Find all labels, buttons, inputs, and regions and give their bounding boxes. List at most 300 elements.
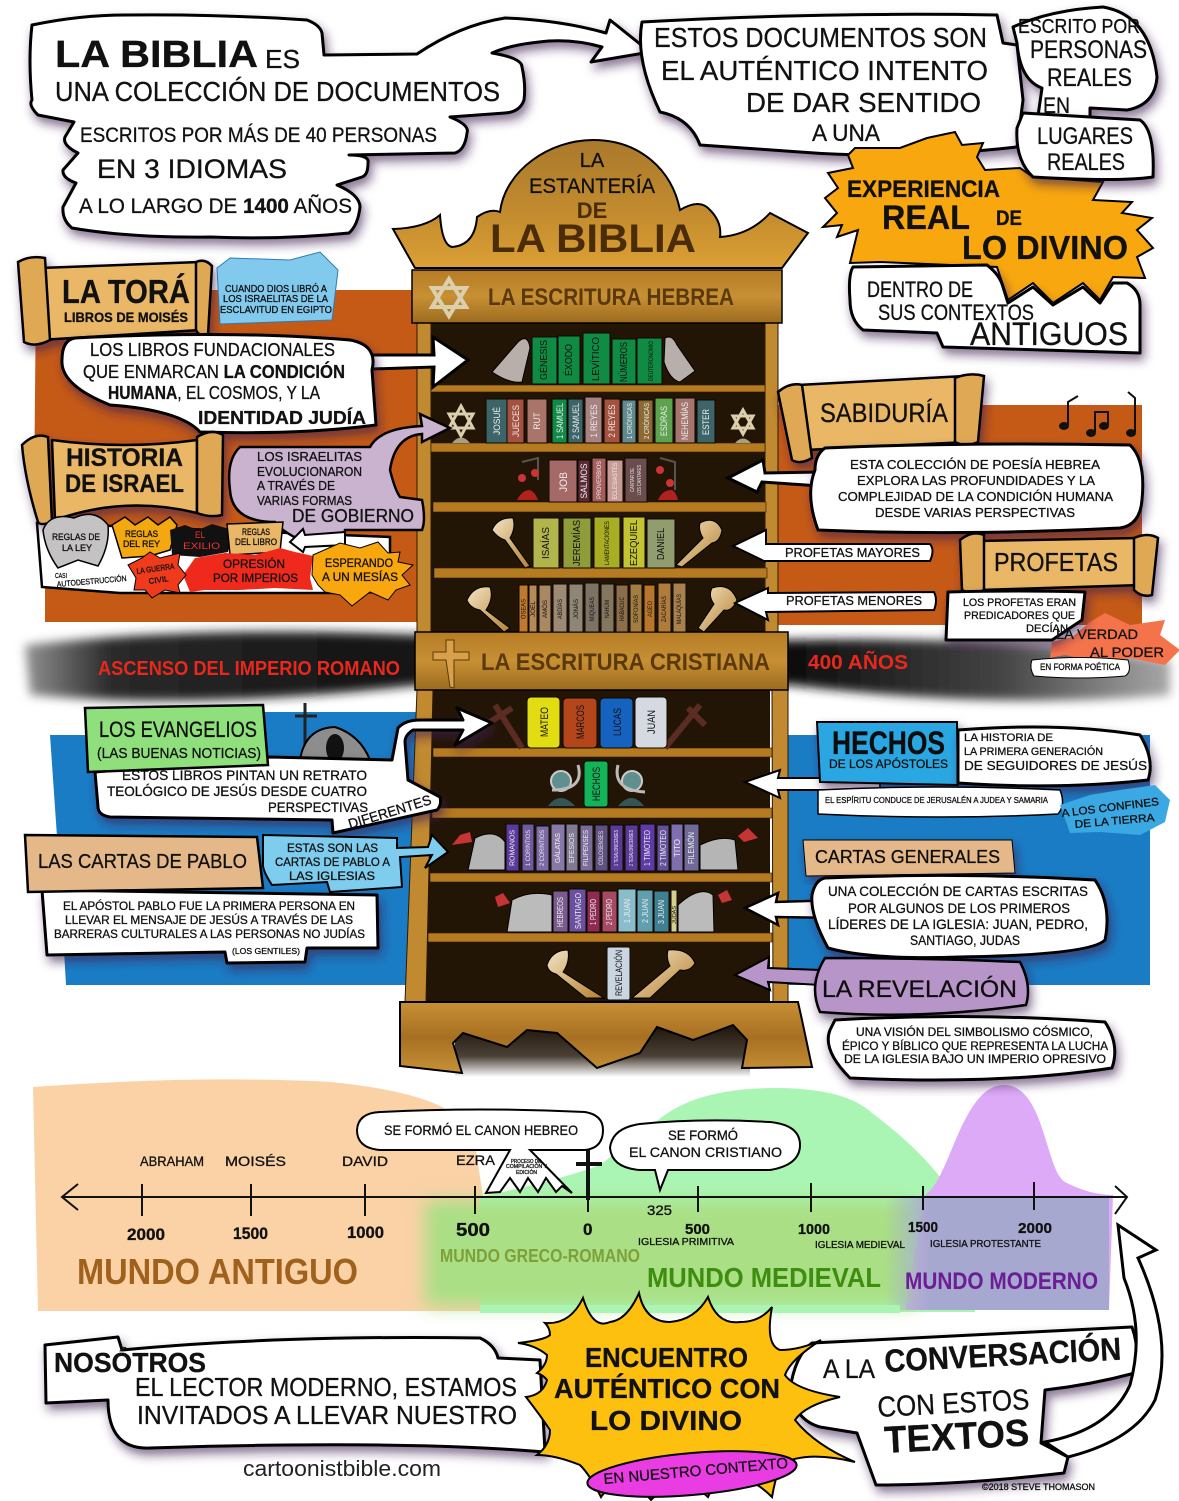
starburst text: REAL	[882, 199, 970, 237]
Nosotros text	[54, 1347, 517, 1430]
La Torá text	[62, 273, 190, 325]
Torah description text: HUMANA, EL COSMOS, Y LA	[108, 383, 320, 403]
badge: Hechos: DE LOS APÓSTOLES	[829, 756, 948, 771]
scroll: Profetas	[960, 533, 1158, 596]
starburst: authentic encounter: ENCUENTRO	[585, 1342, 748, 1373]
revelation description text: DE LA IGLESIA BAJO UN IMPERIO OPRESIVO	[844, 1052, 1106, 1066]
left column	[405, 322, 433, 1002]
tablet: rules of the law	[43, 514, 108, 568]
shelf 1: Torah books: GÉNESIS	[537, 340, 550, 380]
timeline years: 1500	[233, 1224, 268, 1243]
timeline years	[127, 1219, 1052, 1244]
bubble: Christian canon: EL CANON CRISTIANO	[629, 1144, 782, 1160]
real people and places text: REALES	[1047, 64, 1132, 92]
era labels: MUNDO GRECO-ROMANO	[440, 1246, 640, 1266]
bubble: Hebrew canon: SE FORMÓ EL CANON HEBREO	[384, 1122, 578, 1138]
shelf 8: Pauline letters: EFESIOS	[569, 833, 576, 863]
badge: Hechos	[817, 722, 958, 785]
badge: in our context	[586, 1444, 798, 1501]
shelf 2: history books: 2 SAMUEL	[571, 403, 581, 439]
crown title: LA BIBLIA	[490, 217, 696, 261]
documents text: ESTOS DOCUMENTOS SON	[654, 22, 987, 53]
ancient contexts text: SUS CONTEXTOS	[878, 300, 1034, 325]
shelf 4: major prophets: LAMENTACIONES	[605, 521, 611, 565]
documents text	[654, 22, 988, 147]
prophets description text: DECÍAN	[1026, 622, 1068, 635]
timeline	[62, 1110, 1127, 1295]
bubble: prophets description	[946, 591, 1085, 640]
timeline years: 2000	[127, 1225, 165, 1244]
Nosotros text: NOSÓTROS	[54, 1347, 206, 1378]
Paul description text: (LOS GENTILES)	[232, 947, 300, 956]
era labels: MUNDO ANTIGUO	[77, 1251, 358, 1292]
badge: rules of the king	[112, 517, 177, 558]
scroll: rules of the book: REGLAS	[242, 527, 270, 537]
arrow: minor prophets: PROFETAS MENORES	[786, 593, 922, 608]
shelf 2: history books: 1 REYES	[589, 404, 599, 438]
shelf 4: major prophets: EZEQUIEL	[629, 520, 640, 566]
bubble and arrow: forms of government: LOS ISRAELITAS	[257, 449, 362, 464]
arrow: minor prophets	[735, 588, 936, 620]
bubble and arrow: forms of government	[229, 414, 450, 545]
Historia de Israel text: DE ISRAEL	[65, 470, 184, 498]
general letters description text: SANTIAGO, JUDAS	[910, 932, 1020, 948]
Nosotros text: INVITADOS A LLEVAR NUESTRO	[137, 1400, 517, 1430]
shelf 10: Revelation with trumpets: REVELACIÓN	[614, 950, 624, 996]
shelf 1: Torah books	[492, 333, 695, 384]
shelf 1: Torah books: ÉXODO	[562, 344, 575, 376]
wisdom description text: EXPLORA LAS PROFUNDIDADES Y LA	[857, 473, 1095, 488]
shelf 5: minor prophets: OSEAS	[522, 599, 528, 619]
timeline ticks	[142, 1160, 1034, 1216]
title text: A LO LARGO DE 1400 AÑOS	[79, 194, 352, 218]
starburst text	[847, 176, 1128, 266]
burst: the exile: EXILIO	[183, 541, 220, 551]
bubble and arrow: forms of government: DE GOBIERNO	[292, 506, 414, 526]
documents text: A UNA	[812, 120, 880, 147]
scroll: rules of the book: DEL LIBRO	[235, 537, 277, 547]
wisdom description text: COMPLEJIDAD DE LA CONDICIÓN HUMANA	[838, 489, 1113, 504]
shelf 2: history books: JUECES	[511, 405, 521, 437]
shelf 8: Pauline letters: TITO	[673, 839, 682, 857]
Torah description text: LOS LIBROS FUNDACIONALES	[90, 340, 335, 360]
website credit: cartoonistbible.com	[243, 1456, 441, 1481]
starburst text: LO DIVINO	[962, 229, 1128, 266]
timeline figures: EZRA	[456, 1152, 496, 1168]
shelf 2: history books: ESDRAS	[659, 406, 669, 436]
first generation text: LA HISTORIA DE	[964, 732, 1053, 744]
Historia de Israel text: HISTORIA	[66, 444, 183, 472]
tag: Las Cartas de Pablo: LAS CARTAS DE PABLO	[38, 851, 247, 873]
white panel behind history badges	[37, 523, 390, 593]
arrow: Torah to shelf	[360, 337, 468, 387]
crown title: LA	[580, 150, 605, 172]
burst: waiting for a messiah	[312, 542, 413, 606]
title bubble with arrow to documents	[30, 15, 650, 238]
board: La Escritura Hebrea: LA ESCRITURA HEBREA	[488, 284, 734, 311]
Nosotros text: EL LECTOR MODERNO, ESTAMOS	[135, 1372, 517, 1402]
text: near self-destruction: AUTODESTRUCCIÓN	[56, 574, 127, 589]
documents bubble	[640, 14, 1023, 155]
shelf 2: history books: 1 SAMUEL	[555, 403, 565, 439]
bubble: Nosotros	[45, 1337, 545, 1452]
timeline figures	[140, 1152, 672, 1218]
bubble: to the conversation	[790, 1327, 1137, 1485]
shelf 9: general letters: SANTIAGO	[574, 893, 583, 929]
shelf 5: minor prophets: MIQUEAS	[590, 597, 596, 621]
timeline figures: DAVID	[342, 1153, 388, 1169]
timeline years: 1500	[908, 1219, 938, 1236]
shelf 9: general letters: JUDAS	[672, 905, 678, 924]
era labels: MUNDO MODERNO	[905, 1268, 1098, 1295]
shelf 9: general letters: HEBREOS	[556, 897, 565, 927]
bubble: Christian canon	[610, 1120, 800, 1190]
bubble and arrow: to the churches: LAS IGLESIAS	[289, 869, 375, 883]
shelf 8: Pauline letters: GÁLATAS	[553, 833, 562, 863]
truth to power text	[1056, 626, 1164, 660]
timeline years: 2000	[1018, 1220, 1052, 1237]
shelf 5: minor prophets: MALAQUÍAS	[676, 594, 683, 624]
wisdom description text: ESTA COLECCIÓN DE POESÍA HEBREA	[850, 457, 1100, 472]
shelf 8: Pauline letters: 2 CORINTIOS	[540, 830, 546, 866]
scroll: Historia de Israel	[22, 432, 223, 524]
badge: Los Evangelios: (LAS BUENAS NOTICIAS)	[97, 745, 261, 762]
conversation text	[823, 1331, 1122, 1462]
gospels description text: ESTOS LIBROS PINTAN UN RETRATO	[122, 767, 367, 783]
shelf 5: minor prophets: ZACARÍAS	[661, 596, 668, 622]
wisdom description text: DESDE VARIAS PERSPECTIVAS	[875, 505, 1075, 520]
shelf 2: history books: 1 CRÓNICAS	[625, 403, 634, 439]
Torah description text	[83, 340, 366, 428]
burst: ends of the earth: DE LA TIERRA	[1074, 812, 1156, 831]
revelation description text: UNA VISIÓN DEL SIMBOLISMO CÓSMICO,	[856, 1024, 1093, 1039]
documents text: EL AUTÉNTICO INTENTO	[661, 55, 988, 86]
timeline years: 1000	[347, 1223, 384, 1242]
shelf 8: Pauline letters: 2 TESALONICENSES	[629, 830, 635, 866]
shelves	[428, 385, 772, 942]
shelf 2: history books: JOSUÉ	[492, 407, 502, 435]
bubble: Hebrew canon	[357, 1110, 603, 1193]
shelf 1: Torah books: LEVÍTICO	[589, 337, 602, 381]
wisdom description text	[838, 457, 1113, 520]
shelf 9: general letters: 1 PEDRO	[589, 899, 598, 925]
bubble: real people	[1013, 7, 1157, 117]
bubble: the spirit leads: EL ESPÍRITU CONDUCE DE JERUSALÉN A JUDEA Y SAMARIA	[825, 796, 1049, 805]
title text: LA BIBLIA	[55, 34, 258, 76]
bubble and arrow: forms of government: A TRAVÉS DE	[257, 478, 335, 493]
shelf 8: Pauline letters: 1 CORINTIOS	[526, 830, 532, 866]
callout: Exodus note: CUANDO DIOS LIBRÓ A	[225, 282, 327, 295]
gospels description text: TEOLÓGICO DE JESÚS DESDE CUATRO	[107, 783, 367, 799]
timeline figures: 325	[647, 1202, 672, 1218]
shelf 6: gospels: JUAN	[646, 710, 658, 734]
first generation text: DE SEGUIDORES DE JESÚS	[964, 758, 1147, 773]
title text: EN 3 IDIOMAS	[97, 154, 287, 184]
starburst: authentic encounter	[518, 1293, 855, 1500]
tag: Cartas Generales	[803, 840, 1015, 876]
badge: Los Evangelios: LOS EVANGELIOS	[99, 717, 257, 742]
crown title: DE	[577, 198, 607, 223]
real people and places text	[1018, 16, 1147, 176]
church periods: IGLESIA PRIMITIVA	[638, 1237, 734, 1248]
badge: Los Evangelios	[85, 705, 268, 772]
shelf 5: minor prophets	[467, 583, 737, 632]
text: 400 years: 400 AÑOS	[808, 651, 908, 674]
big curved arrow	[1045, 1225, 1162, 1457]
callout: Exodus note: LOS ISRAELITAS DE LA	[223, 294, 328, 305]
shelf 9: general letters: 1 JUAN	[623, 899, 632, 923]
Sabiduría title: SABIDURÍA	[820, 398, 948, 428]
panel: blue background left	[50, 712, 420, 985]
burst: civil war	[128, 552, 186, 598]
badge: La Revelación: LA REVELACIÓN	[822, 976, 1017, 1003]
Paul description text: BARRERAS CULTURALES A LAS PERSONAS NO JUDÍAS	[54, 926, 365, 941]
shelf 9: general letters: 3 JUAN	[657, 900, 666, 924]
shelf 3: wisdom books: SALMOS	[579, 464, 589, 498]
burst: truth to power	[1050, 613, 1179, 665]
scroll: rules of the book	[227, 522, 283, 555]
crown title: ESTANTERÍA	[529, 175, 655, 198]
bubble: the spirit leads	[818, 787, 1063, 817]
truth to power text: AL PODER	[1090, 644, 1164, 660]
bubble and arrow: forms of government: VARIAS FORMAS	[257, 493, 352, 508]
shelf 8: Pauline letters: 1 TESALONICENSES	[614, 830, 620, 866]
La Torá text: LIBROS DE MOISÉS	[64, 309, 188, 325]
callout: Exodus note: ESCLAVITUD EN EGIPTO	[220, 305, 332, 316]
crown title	[490, 150, 696, 261]
Historia de Israel text	[65, 444, 184, 498]
general letters description text: LÍDERES DE LA IGLESIA: JUAN, PEDRO,	[828, 916, 1088, 932]
arrow: major prophets	[733, 530, 932, 562]
documents text: DE DAR SENTIDO	[746, 87, 981, 118]
bubble and arrow: forms of government: EVOLUCIONARON	[257, 464, 362, 479]
badge: Hechos: HECHOS	[832, 725, 945, 761]
real people and places text: REALES	[1047, 149, 1125, 176]
burst: ends of the earth	[1060, 785, 1170, 835]
shelf 3: wisdom books: JOB	[558, 472, 570, 492]
arrow: wisdom to shelf	[728, 460, 820, 492]
bookcase base	[400, 1002, 812, 1073]
prophets description text	[963, 597, 1076, 635]
shelf 7: acts with globes: HECHOS	[591, 767, 603, 801]
shelf 2: history books: 2 REYES	[607, 404, 617, 438]
church periods: IGLESIA PROTESTANTE	[930, 1239, 1041, 1250]
prophets description text: LOS PROFETAS ERAN	[963, 597, 1076, 609]
shelf 3: wisdom books: LOS CANTARES	[637, 464, 643, 495]
timeline years: 500	[456, 1220, 490, 1240]
tag: Cartas Generales: CARTAS GENERALES	[815, 847, 1000, 867]
burst: the exile: EL	[195, 530, 205, 540]
title text	[55, 34, 500, 218]
arrow: law books	[290, 529, 345, 552]
shelf 6: gospels: LUCAS	[612, 708, 624, 736]
shelf 5: minor prophets: JONÁS	[573, 599, 580, 619]
tag: Las Cartas de Pablo	[25, 835, 263, 892]
shelf 8: Pauline letters: 2 TIMOTEO	[659, 830, 668, 866]
Paul description text	[54, 898, 365, 956]
La Torá text: LA TORÁ	[62, 273, 190, 310]
shelf 9: general letters: 2 JUAN	[641, 899, 650, 923]
panel: orange background left	[34, 290, 420, 622]
arrow: revelation to shelf	[735, 957, 820, 990]
shelf 6: gospels: MATEO	[539, 707, 551, 737]
tablet: rules of the law: LA LEY	[62, 543, 92, 553]
timeline figures: MOISÉS	[225, 1153, 286, 1169]
gospels description text	[107, 767, 433, 832]
scroll: La Torá	[18, 257, 212, 345]
icon: music notes	[1060, 392, 1135, 436]
black band: rise of the Roman Empire	[25, 632, 1170, 701]
shelf 6: gospels	[490, 697, 705, 748]
Paul description text: EL APÓSTOL PABLO FUE LA PRIMERA PERSONA EN	[63, 898, 355, 913]
bubble: Hebrew canon: PROCESO DE	[511, 1159, 541, 1165]
first generation text: LA PRIMERA GENERACIÓN	[964, 745, 1103, 758]
shelf 1: Torah books: DEUTERONOMIO	[649, 341, 655, 381]
shelf 8: Pauline letters: ROMANOS	[510, 830, 516, 866]
bubble: Christian canon: SE FORMÓ	[668, 1127, 738, 1143]
revelation description text: ÉPICO Y BÍBLICO QUE REPRESENTA LA LUCHA	[842, 1038, 1108, 1053]
burst: waiting for a messiah: A UN MESÍAS	[322, 569, 398, 584]
ancient contexts text: ANTIGUOS	[970, 316, 1128, 352]
shelf 5: minor prophets: JOEL	[531, 600, 537, 617]
shelf 2: history books: RUT	[532, 412, 542, 430]
timeline years: 500	[685, 1221, 710, 1238]
Profetas title: PROFETAS	[994, 547, 1118, 577]
shelf 10: Revelation with trumpets	[547, 947, 695, 1000]
shelf 2: history books: 2 CRÓNICAS	[642, 403, 651, 439]
shelf 4: major prophets: JEREMÍAS	[570, 520, 583, 566]
title text: ES	[265, 44, 300, 74]
real people and places text: ESCRITO POR	[1018, 16, 1140, 38]
Torah description text: QUE ENMARCAN LA CONDICIÓN	[83, 361, 345, 382]
copyright: ©2018 STEVE THOMASON	[982, 1482, 1095, 1492]
panel: orange background right	[775, 405, 1142, 625]
tablet: rules of the law: REGLAS DE	[52, 532, 100, 542]
shelf 8: Pauline letters: 1 TIMOTEO	[643, 830, 652, 866]
shelf 2: history books: ESTER	[701, 409, 711, 435]
gospels description text: DIFERENTES	[346, 791, 433, 832]
arrow: general letters to shelf	[745, 893, 840, 925]
Torah description text: IDENTIDAD JUDÍA	[198, 407, 366, 428]
Paul description text: LLEVAR EL MENSAJE DE JESÚS A TRAVÉS DE LAS	[65, 912, 353, 927]
board: La Escritura Hebrea	[412, 270, 782, 323]
badge: in our context: EN NUESTRO CONTEXTO	[603, 1455, 789, 1488]
bubble: poetic form: EN FORMA POÉTICA	[1040, 662, 1120, 672]
text: rise of the Roman Empire: ASCENSO DEL IMPERIO ROMANO	[98, 658, 400, 680]
starburst text: EXPERIENCIA	[847, 176, 1000, 203]
general letters description text: POR ALGUNOS DE LOS PRIMEROS	[848, 900, 1070, 916]
burst: waiting for a messiah: ESPERANDO	[325, 556, 393, 570]
shelf 7: acts with globes	[548, 761, 645, 807]
shelf 4: major prophets	[492, 517, 722, 568]
bubble: revelation description	[828, 1016, 1115, 1080]
ancient contexts text	[867, 277, 1128, 352]
shelf 3: wisdom books	[517, 458, 678, 502]
arrow: acts to shelf	[745, 770, 880, 798]
conversation text: TEXTOS	[883, 1412, 1030, 1462]
truth to power text: LA VERDAD	[1056, 626, 1138, 642]
shelf 9: general letters	[495, 889, 732, 932]
first generation text	[964, 732, 1147, 773]
callout: Exodus note	[217, 252, 338, 324]
shelf 2: history books	[449, 397, 753, 443]
church periods	[638, 1237, 1041, 1251]
timeline years: 1000	[798, 1221, 830, 1238]
bubble and arrow: to the churches: CARTAS DE PABLO A	[275, 855, 390, 869]
timeline figures: ABRAHAM	[140, 1153, 204, 1169]
shelf 4: major prophets: ISAÍAS	[539, 527, 552, 559]
era labels	[77, 1246, 1098, 1295]
bubble: ancient contexts	[849, 265, 1140, 353]
bubble: Torah description	[62, 334, 376, 433]
era labels: MUNDO MEDIEVAL	[647, 1262, 881, 1293]
conversation text: A LA	[823, 1354, 875, 1384]
shelf 5: minor prophets: HABACUC	[620, 596, 626, 621]
shelf 8: Pauline letters: FILEMÓN	[687, 832, 696, 864]
conversation text: CON ESTOS	[877, 1384, 1030, 1424]
burst: oppression by empires	[183, 548, 313, 592]
arrow: major prophets: PROFETAS MAYORES	[785, 545, 920, 560]
shelf 5: minor prophets: ABDÍAS	[557, 599, 564, 619]
shelf 5: minor prophets: AGEO	[648, 601, 654, 617]
starburst text: DE	[996, 207, 1022, 230]
starburst: real experience shape	[823, 132, 1153, 303]
bubble: Paul description	[42, 890, 378, 963]
text: near self-destruction: CASI	[55, 573, 67, 580]
burst: the exile	[170, 524, 233, 557]
bubble and arrow: gospels description	[95, 708, 492, 833]
shelf 6: gospels: MARCOS	[575, 705, 587, 739]
timeline background: eras	[33, 1079, 1113, 1313]
bubble: first generation	[958, 727, 1150, 786]
revelation description text	[842, 1024, 1108, 1066]
shelf 3: wisdom books: CANTAR DE	[630, 467, 636, 492]
bubble: poetic form	[1031, 658, 1129, 678]
shelf 1: Torah books: NÚMEROS	[617, 342, 630, 382]
prophets description text: PREDICADORES QUE	[964, 610, 1075, 622]
real people and places text: LUGARES	[1037, 123, 1133, 150]
bubble: Hebrew canon: EDICIÓN	[516, 1169, 537, 1176]
shelf 5: minor prophets: AMÓS	[542, 600, 549, 618]
ancient contexts text: DENTRO DE	[867, 277, 973, 302]
timeline years: 0	[583, 1220, 592, 1239]
conversation text: CONVERSACIÓN	[883, 1331, 1122, 1379]
badge: rules of the king: DEL REY	[123, 539, 160, 549]
burst: oppression by empires: OPRESIÓN	[223, 556, 285, 571]
starburst: authentic encounter: LO DIVINO	[590, 1405, 742, 1436]
board: La Escritura Cristiana: LA ESCRITURA CRISTIANA	[481, 649, 770, 676]
burst: civil war: CIVIL	[148, 574, 170, 586]
starburst: authentic encounter: AUTÉNTICO CON	[554, 1373, 780, 1404]
burst: civil war: LA GUERRA	[136, 562, 175, 576]
right column	[765, 322, 788, 1002]
badge: La Revelación	[815, 958, 1028, 1015]
shelf 8: Pauline letters	[452, 824, 758, 871]
bookcase crown	[393, 140, 808, 268]
bubble and arrow: to the churches	[263, 835, 448, 892]
badge: rules of the king: REGLAS	[125, 529, 158, 539]
burst: ends of the earth: A LOS CONFINES	[1061, 796, 1160, 820]
bubble and arrow: to the churches: ESTAS SON LAS	[287, 841, 378, 855]
bubble: real places	[1017, 113, 1153, 180]
real people and places text: EN	[1043, 93, 1070, 118]
board: La Escritura Cristiana	[415, 632, 788, 690]
shelf 2: history books: NEHEMÍAS	[680, 402, 690, 440]
gospels description text: PERSPECTIVAS	[268, 799, 368, 815]
bookcase interior	[425, 320, 770, 1005]
shadow under the bookcase base	[455, 1025, 750, 1077]
bookcase	[393, 140, 812, 1077]
